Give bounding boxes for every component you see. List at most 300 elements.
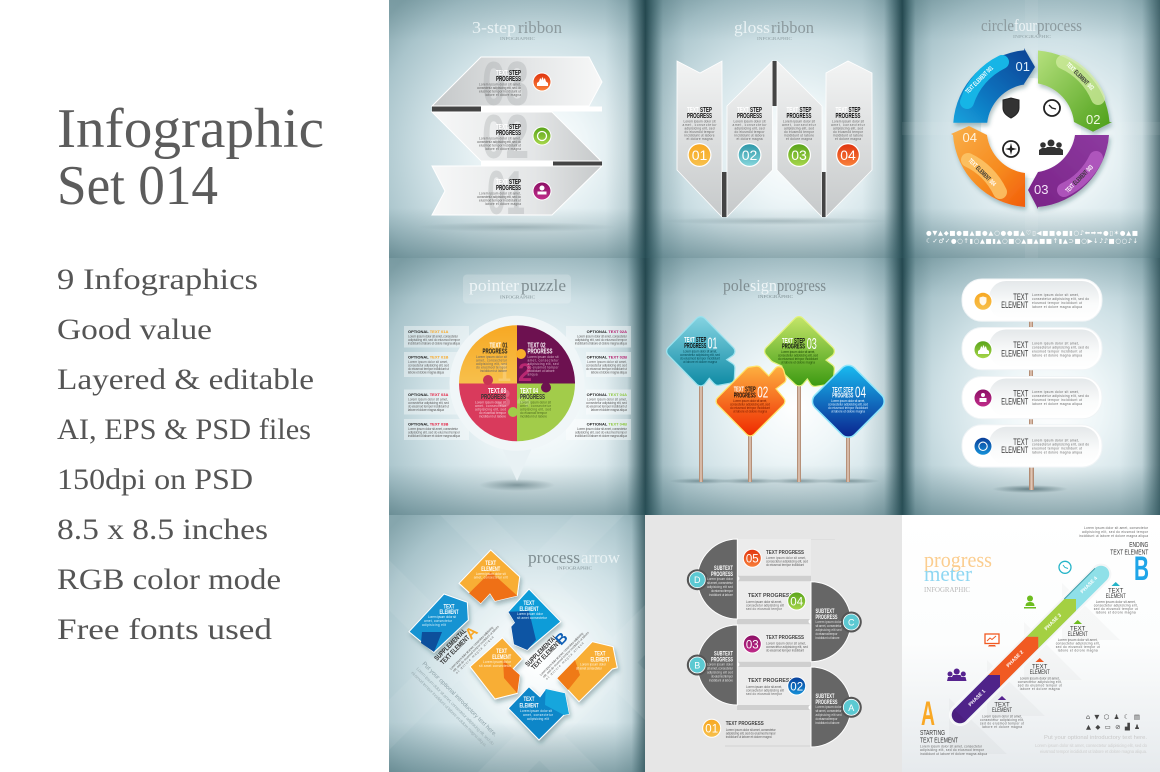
icon: compass bbox=[1003, 141, 1019, 157]
side text boxes right: OPTIONAL TEXT 04A bbox=[587, 392, 627, 397]
ribbon 03: TEXT STEP bbox=[786, 107, 812, 114]
heading bbox=[734, 18, 814, 41]
center disc bbox=[981, 78, 1081, 178]
panel: progress meter bbox=[902, 515, 1160, 772]
ribbon 01: 01 bbox=[692, 147, 707, 163]
half circle D: PROGRESS bbox=[711, 571, 733, 578]
pill 4: Lorem ipsum dolor sit amet, bbox=[1032, 438, 1079, 442]
side text boxes right: OPTIONAL TEXT 02B bbox=[587, 354, 627, 360]
side text boxes right: OPTIONAL TEXT 02A bbox=[587, 329, 627, 334]
half circle C: Lorem ipsum dolor bbox=[816, 620, 842, 624]
quadrant text 03: TEXT 03 bbox=[488, 388, 506, 395]
puzzle circle: 3 bbox=[497, 385, 511, 413]
pole segments bbox=[1029, 321, 1034, 490]
green arrow 02: TEXT ELEMENT 002 bbox=[1065, 61, 1095, 92]
heading: sign bbox=[750, 276, 777, 295]
heading: arrow bbox=[581, 548, 621, 567]
ribbon 03: consectetur adipisicing elit, sed do bbox=[477, 86, 521, 90]
quadrant text 02: Lorem ipsum dolor sit bbox=[528, 355, 559, 359]
half circle C: incididunt ut labore bbox=[816, 636, 840, 640]
step 03: do eiusmod tempor incididunt bbox=[766, 648, 804, 652]
side text boxes right: Lorem ipsum dolor sit amet, consectetur bbox=[577, 427, 628, 431]
callout phase 4: TEXT bbox=[1108, 588, 1124, 594]
ribbon 02: Lorem ipsum dolor sit bbox=[734, 120, 766, 124]
heading: four bbox=[1014, 16, 1037, 35]
side text boxes left: consectetur adipisicing elit, sed bbox=[408, 401, 449, 405]
heading: INFOGRAPHIC bbox=[500, 36, 535, 41]
sign 01: ut labore et dolore magna bbox=[683, 360, 717, 364]
purple arrow 03: TEXT ELEMENT 003 bbox=[1064, 164, 1095, 194]
side text boxes left: Lorem ipsum dolor sit amet, consectetur bbox=[408, 334, 459, 338]
sign 04: Lorem ipsum dolor sit amet, bbox=[831, 399, 865, 403]
pill 2: eiusmod tempor incididunt ut bbox=[1032, 350, 1082, 354]
quadrant text 01: TEXT 01 bbox=[490, 342, 508, 350]
row label 02: TEXT PROGRESS bbox=[748, 678, 793, 684]
ribbon 02: TEXT STEP bbox=[496, 124, 521, 131]
purple arrow 03 bbox=[1028, 135, 1109, 209]
heading bbox=[472, 18, 562, 41]
rows bbox=[725, 539, 835, 747]
sign 01: 01 bbox=[708, 336, 718, 353]
sign 04: PROGRESS bbox=[832, 392, 853, 400]
step 03: consectetur adipisicing elit, sed bbox=[766, 645, 808, 649]
side text boxes right: Lorem ipsum dolor sit amet, bbox=[587, 398, 627, 402]
sign 01 bbox=[672, 322, 730, 380]
sign 04: TEXT STEP bbox=[832, 387, 853, 394]
quadrant text 03 bbox=[475, 388, 507, 418]
callout phase 4: labore et dolore magna bbox=[1096, 610, 1136, 614]
orange right arrow bbox=[557, 642, 617, 702]
callout phase 3: Lorem ipsum dolor sit amet, bbox=[1058, 638, 1098, 642]
quadrant text 04: PROGRESS bbox=[520, 394, 545, 401]
puzzle circle: 2 bbox=[518, 359, 532, 387]
callout phase 3: ELEMENT bbox=[1068, 632, 1088, 638]
sign 02: do eiusmod tempor incididunt bbox=[730, 406, 770, 410]
callout phase 3: sed do eiusmod tempor ut bbox=[1056, 645, 1100, 649]
feature list: Free fonts used bbox=[57, 613, 272, 646]
pill 2: ELEMENT bbox=[1001, 348, 1029, 358]
phase 2 segment: PHASE 2 bbox=[1006, 649, 1025, 669]
orange top arrow: TEXT bbox=[485, 561, 496, 567]
quadrant text 02: aliqua bbox=[528, 372, 538, 376]
pill 4: labore et dolore magna aliqua bbox=[1032, 450, 1082, 454]
half circle D: adipisicing elit sed bbox=[707, 585, 733, 589]
step 05: TEXT PROGRESS bbox=[766, 550, 804, 556]
pill 3: Lorem ipsum dolor sit amet, bbox=[1032, 390, 1079, 394]
pill 1: eiusmod tempor incididunt ut bbox=[1032, 301, 1082, 305]
row label 04: consectetur adipisicing elit bbox=[746, 604, 784, 608]
half circle C: SUBTEXT bbox=[816, 608, 835, 615]
side text boxes left: labore et dolore magna aliqua bbox=[408, 408, 444, 412]
sign 03: consectetur adipisicing elit, sed bbox=[778, 354, 818, 358]
half circle C bbox=[811, 582, 862, 662]
ending text block: adipisicing elit, sed do eiusmod tempor bbox=[1082, 530, 1149, 534]
sign 01: TEXT STEP bbox=[684, 337, 706, 344]
callout phase 2: labore et dolore magna bbox=[1020, 687, 1060, 691]
starting text block: Lorem ipsum dolor sit amet, consectetur bbox=[920, 744, 983, 748]
heading bbox=[924, 547, 992, 594]
step 05: consectetur adipisicing elit, sed bbox=[766, 560, 808, 564]
ending text block: incididunt ut labore et dolore magna aliqua bbox=[1079, 534, 1148, 538]
ribbon 04: amet, consectetur bbox=[831, 123, 866, 127]
phase 1 segment: PHASE 1 bbox=[968, 688, 987, 708]
ending text block: B bbox=[1134, 550, 1149, 588]
pill 1: ELEMENT bbox=[1001, 300, 1029, 310]
ribbon 01: incididunt ut labore bbox=[684, 134, 715, 138]
pill 4: consectetur adipisicing elit, sed do bbox=[1032, 442, 1089, 446]
ribbon 01: PROGRESS bbox=[687, 113, 712, 120]
ribbon 03: TEXT STEP bbox=[496, 70, 521, 77]
intro copy bbox=[1035, 735, 1148, 754]
row label 02: 02 bbox=[790, 681, 803, 693]
callout phase 1: consectetur adipisicing elit, bbox=[980, 718, 1024, 722]
heading: INFOGRAPHIC bbox=[757, 36, 792, 41]
feature list bbox=[57, 263, 314, 646]
half circle A: Lorem ipsum dolor bbox=[816, 705, 842, 709]
quadrant text 01: amet, consectetur bbox=[476, 358, 508, 362]
quadrant text 02: amet, consectetur bbox=[528, 358, 559, 362]
orange middle arrow: Lorem ipsum dolor bbox=[483, 660, 512, 664]
sign 01: Lorem ipsum dolor sit amet, bbox=[683, 350, 717, 354]
callout phase 3: TEXT bbox=[1070, 626, 1086, 632]
row label 04 bbox=[746, 592, 806, 611]
quadrant text 02: PROGRESS bbox=[528, 348, 553, 356]
ribbon 01: TEXT STEP bbox=[496, 179, 521, 186]
callout phase 1 bbox=[980, 696, 1024, 729]
ribbon 03: eiusmod tempor incididunt ut bbox=[479, 90, 521, 94]
sign 04: do eiusmod tempor incididunt bbox=[828, 406, 868, 410]
heading: process bbox=[528, 548, 580, 567]
intro text: eiusmod tempor incididunt ut labore et dolore magna aliqua. bbox=[410, 670, 488, 748]
ribbon 03: Lorem ipsum dolor sit bbox=[783, 120, 815, 124]
icon: clock bbox=[1044, 100, 1060, 116]
ribbon 02: 02 bbox=[742, 147, 757, 163]
intro copy: Lorem ipsum dolor sit amet, consectetur adipisicing elit, sed do bbox=[1035, 743, 1148, 748]
pill 2: labore et dolore magna aliqua bbox=[1032, 354, 1082, 358]
starting text block: incididunt ut labore et dolore magna aliqua bbox=[920, 752, 987, 756]
callout phase 1: Lorem ipsum dolor sit amet, bbox=[982, 714, 1022, 718]
step 03: TEXT PROGRESS bbox=[766, 635, 804, 641]
row label 04: TEXT PROGRESS bbox=[748, 593, 793, 599]
half circle A: SUBTEXT bbox=[816, 693, 835, 700]
quadrant text 01: adipisicing elit, sed bbox=[476, 362, 507, 366]
half circle D: D bbox=[694, 575, 701, 585]
step 01: TEXT PROGRESS bbox=[726, 721, 764, 727]
heading: 3-step bbox=[472, 18, 516, 37]
half circle C: do eiusmod tempor bbox=[816, 632, 838, 636]
heading: progress bbox=[924, 547, 992, 572]
heading: ribbon bbox=[518, 18, 562, 37]
ribbon 02: incididunt ut labore bbox=[734, 134, 765, 138]
quadrant text 01 bbox=[476, 342, 508, 373]
feature list: 9 Infographics bbox=[57, 263, 258, 296]
ribbon 02: et dolore magna bbox=[736, 137, 763, 141]
sign 04: consectetur adipisicing elit, sed bbox=[828, 402, 868, 406]
ribbon 04: TEXT STEP bbox=[836, 107, 861, 114]
quadrant text 04: do eiusmod tempor bbox=[520, 411, 548, 415]
ribbon 01: PROGRESS bbox=[496, 185, 521, 192]
half circle C: adipisicing elit sed bbox=[816, 628, 842, 632]
blue bottom arrow bbox=[508, 687, 569, 740]
blue bottom arrow: TEXT bbox=[524, 697, 535, 703]
blue right arrow: Lorem ipsum dolor bbox=[517, 612, 544, 616]
orange arrow 04: 04 bbox=[962, 130, 977, 145]
supplemental text A: elit, sed do eiusmod tempor incididunt ut labore bbox=[452, 624, 500, 673]
ribbon 02: PROGRESS bbox=[737, 113, 762, 120]
half circle D: incididunt ut labore bbox=[709, 593, 733, 597]
half circle C: C bbox=[848, 618, 855, 628]
step 03 bbox=[743, 635, 808, 653]
sign 01: do eiusmod tempor incididunt bbox=[680, 356, 720, 360]
callout phase 4: ELEMENT bbox=[1106, 594, 1126, 600]
callout phase 2: ELEMENT bbox=[1030, 670, 1050, 676]
supplemental text B: TEXT ELEMENT bbox=[530, 639, 563, 671]
pill 3: TEXT bbox=[1013, 388, 1029, 398]
heading: progress bbox=[777, 276, 826, 295]
green arrow 02 bbox=[1038, 50, 1112, 132]
ribbon 01 bbox=[677, 61, 726, 217]
panel: vertical pill list bbox=[902, 258, 1160, 515]
blue left arrow: TEXT bbox=[444, 604, 455, 610]
icon: person bbox=[1024, 596, 1036, 608]
ribbon 03: amet, consectetur bbox=[782, 123, 817, 127]
sign 04 bbox=[809, 362, 888, 441]
row label 02: sed do eiusmod tempor bbox=[746, 692, 783, 696]
small icons grid bbox=[1086, 713, 1140, 731]
ribbon 03 bbox=[432, 50, 602, 119]
supplemental text B: Lorem ipsum dolor sit amet, consectetur adipisicing bbox=[539, 631, 584, 677]
pointer pin bbox=[450, 316, 584, 481]
icon: clock bbox=[1059, 561, 1071, 573]
supplemental text A: et dolore magna aliqua bbox=[455, 635, 495, 675]
half circle D: sit amet, consectetur bbox=[707, 581, 734, 585]
quadrant text 03: PROGRESS bbox=[481, 394, 506, 401]
sign 03: do eiusmod tempor incididunt bbox=[778, 357, 818, 361]
quadrant text 04: adipisicing elit, sed bbox=[520, 408, 551, 412]
ribbon 01: Lorem ipsum dolor sit amet, bbox=[479, 192, 521, 196]
row label 04: 04 bbox=[790, 596, 804, 608]
quadrant text 03: adipisicing elit, sed bbox=[475, 408, 506, 412]
feature list: AI, EPS & PSD files bbox=[57, 413, 311, 446]
icon: shield bbox=[1003, 98, 1019, 118]
ribbon 03: Lorem ipsum dolor sit amet, bbox=[479, 82, 521, 86]
sign 03 bbox=[770, 322, 829, 381]
ribbon 04: Lorem ipsum dolor sit bbox=[832, 120, 864, 124]
orange middle arrow: sit amet consectetur bbox=[479, 664, 512, 668]
ribbon 01: TEXT STEP bbox=[687, 107, 712, 114]
heading: INFOGRAPHIC bbox=[758, 294, 793, 299]
phase 3 segment: PHASE 3 bbox=[1044, 612, 1063, 632]
poles bbox=[699, 385, 850, 482]
blue right arrow: ELEMENT bbox=[520, 607, 539, 613]
ribbon 03: 03 bbox=[482, 50, 529, 119]
pill 1: TEXT bbox=[1013, 292, 1029, 302]
side text boxes right: do eiusmod tempor incididunt ut bbox=[586, 367, 627, 371]
side text boxes right: incididunt ut labore et dolore magna aliqua bbox=[575, 342, 627, 346]
callout phase 3: labore et dolore magna bbox=[1058, 648, 1098, 652]
supplemental text A bbox=[433, 623, 500, 675]
blue bottom arrow: adipisicing elit bbox=[527, 717, 549, 721]
starting text block: TEXT ELEMENT bbox=[920, 736, 958, 744]
blue bottom arrow: ELEMENT bbox=[520, 704, 539, 710]
ending text block bbox=[1079, 526, 1149, 588]
callout phase 4: sed do eiusmod tempor ut bbox=[1094, 607, 1138, 611]
side text boxes left: Lorem ipsum dolor sit amet, bbox=[408, 398, 448, 402]
side text boxes right: labore et dolore magna aliqua bbox=[591, 408, 627, 412]
half circle B: incididunt ut labore bbox=[709, 678, 733, 682]
ribbon 02 bbox=[727, 61, 777, 217]
ribbon 01: eiusmod tempor incididunt ut bbox=[479, 198, 521, 202]
panel: pole sign progress bbox=[645, 258, 902, 515]
quadrant text 01: PROGRESS bbox=[482, 348, 508, 356]
ribbon 03: 03 bbox=[791, 147, 807, 163]
side text boxes left: OPTIONAL TEXT 03B bbox=[408, 422, 449, 426]
feature list: Good value bbox=[57, 313, 212, 346]
circular arrows bbox=[951, 48, 1112, 209]
heading: INFOGRAPHIC bbox=[1013, 34, 1051, 39]
panel: circle four process bbox=[902, 0, 1160, 258]
side text boxes left: OPTIONAL TEXT 01B bbox=[408, 354, 449, 360]
heading bbox=[463, 274, 571, 304]
ribbon 04: et dolore magna bbox=[835, 137, 861, 141]
pill 3: eiusmod tempor incididunt ut bbox=[1032, 398, 1082, 402]
pill 4: TEXT bbox=[1013, 437, 1029, 447]
orange right arrow: ELEMENT bbox=[590, 658, 610, 664]
blue right arrow: sit amet consectetur bbox=[517, 616, 548, 620]
blue left arrow: amet, consectetur bbox=[424, 619, 453, 623]
pill 1 bbox=[962, 279, 1102, 321]
side text boxes left: OPTIONAL TEXT 01A bbox=[408, 329, 449, 334]
half circle A: sit amet, consectetur bbox=[816, 709, 842, 713]
phase 1 segment bbox=[952, 675, 1000, 723]
step 01: adipisicing elit, sed do eiusmod tempor bbox=[726, 732, 777, 736]
sign 04: ut labore et dolore magna bbox=[831, 410, 865, 414]
quadrant text 01: do eiusmod tempor bbox=[476, 366, 508, 370]
icon strip: ●▼▲◆■●■▲■●▲○●●■▲♡▯◀■■●■▮○♪⬅➡➡●▯✶●▲■ bbox=[926, 229, 1138, 237]
orange top arrow bbox=[459, 550, 520, 603]
half circle A: PROGRESS bbox=[816, 699, 838, 706]
orange top arrow: ELEMENT bbox=[481, 567, 500, 573]
icon strip bbox=[926, 229, 1138, 245]
side text boxes left: Lorem ipsum dolor sit amet, consectetur bbox=[408, 427, 459, 431]
ribbon 04: 04 bbox=[840, 147, 856, 163]
blue arrow 01: TEXT ELEMENT 001 bbox=[964, 65, 995, 95]
feature list: RGB color mode bbox=[57, 563, 281, 596]
callout phase 4 bbox=[1094, 582, 1138, 614]
ribbon 01: amet, consectetur bbox=[682, 123, 717, 127]
blue arrow 01 bbox=[953, 48, 1035, 123]
quadrant text 04 bbox=[520, 388, 552, 418]
ending text block: Lorem ipsum dolor sit amet, consectetur bbox=[1084, 526, 1149, 530]
callout phase 3 bbox=[1056, 620, 1100, 652]
blue bottom arrow: amet, consectetur bbox=[523, 713, 554, 717]
ribbon 02: eiusmod tempor incididunt ut bbox=[479, 144, 521, 148]
side text boxes right: do eiusmod tempor incididunt ut bbox=[586, 404, 627, 408]
ribbon 02: do eiusmod tempor bbox=[734, 130, 765, 134]
blue left arrow: adipisicing elit bbox=[422, 623, 446, 627]
row label 02: consectetur adipisicing elit bbox=[746, 688, 784, 692]
side text boxes left: do eiusmod tempor incididunt ut bbox=[408, 367, 449, 371]
blue left arrow: ELEMENT bbox=[440, 610, 459, 616]
orange right arrow: TEXT bbox=[594, 652, 606, 658]
pill 3: labore et dolore magna aliqua bbox=[1032, 402, 1082, 406]
panel: grey subtext progress bbox=[645, 515, 902, 772]
quadrant text 03: incididunt ut labore bbox=[479, 414, 506, 418]
half circle B: SUBTEXT bbox=[714, 650, 733, 658]
ribbon 02: TEXT STEP bbox=[737, 107, 762, 114]
pole shadows bbox=[669, 478, 880, 484]
callout phase 3: consectetur adipisicing elit, bbox=[1056, 642, 1100, 646]
pill 2: Lorem ipsum dolor sit amet, bbox=[1032, 342, 1079, 346]
half circle D: SUBTEXT bbox=[714, 565, 733, 572]
quadrant text 01: Lorem ipsum dolor sit bbox=[476, 355, 507, 359]
step 01: incididunt ut labore et dolore magna bbox=[726, 735, 772, 739]
orange middle arrow: ELEMENT bbox=[492, 655, 511, 661]
half circle B bbox=[687, 625, 737, 705]
feature list: 8.5 x 8.5 inches bbox=[57, 513, 268, 546]
ribbon 01: 01 bbox=[487, 159, 525, 228]
sign 01: PROGRESS bbox=[684, 343, 706, 350]
row label 02 bbox=[746, 677, 806, 696]
green arrow 02: 02 bbox=[1086, 112, 1100, 127]
small icons grid: ▲ ◆ ▭ ⊘ ▟ ♟ bbox=[1086, 723, 1140, 731]
phase 4 segment: PHASE 4 bbox=[1080, 575, 1099, 595]
ribbon 02: labore et dolore magna bbox=[485, 147, 521, 151]
heading: gloss bbox=[734, 18, 770, 37]
callout phase 2 bbox=[1018, 658, 1062, 691]
heading: meter bbox=[924, 561, 973, 586]
ending text block: ENDING bbox=[1129, 540, 1148, 549]
supplemental text A: Lorem ipsum dolor sit amet, consectetur adipisicing bbox=[449, 625, 494, 671]
ribbon 04: PROGRESS bbox=[836, 113, 861, 120]
panel: 3-step ribbon bbox=[389, 0, 645, 258]
ribbon 01: Lorem ipsum dolor sit bbox=[684, 120, 716, 124]
ribbon 03: PROGRESS bbox=[786, 113, 812, 120]
ribbon 01: labore et dolore magna bbox=[485, 202, 521, 206]
puzzle circle bbox=[459, 325, 575, 442]
side text boxes left: consectetur adipisicing elit, sed bbox=[408, 364, 449, 368]
quadrant text 03: amet, consectetur bbox=[475, 404, 507, 408]
heading bbox=[981, 16, 1082, 39]
orange arrow 04: TEXT ELEMENT 004 bbox=[967, 157, 997, 188]
ribbon 02: amet, consectetur bbox=[732, 123, 767, 127]
pill 3: consectetur adipisicing elit, sed do bbox=[1032, 394, 1089, 398]
heading: pointer bbox=[469, 276, 519, 295]
orange middle arrow: TEXT bbox=[496, 649, 507, 655]
sign 03: Lorem ipsum dolor sit amet, bbox=[781, 350, 815, 354]
callout phase 1: ELEMENT bbox=[992, 708, 1012, 714]
ribbon 03 bbox=[777, 61, 826, 217]
phase 2 segment bbox=[988, 637, 1038, 687]
quadrant text 04: amet, consectetur bbox=[520, 404, 552, 408]
ribbon 02: 02 bbox=[482, 103, 529, 172]
side text boxes right: adipisicing elit, sed do eiusmod tempor bbox=[575, 430, 628, 434]
step 05: do eiusmod tempor incididunt bbox=[766, 563, 804, 567]
sign 02: ut labore et dolore magna bbox=[733, 410, 767, 414]
panel: gloss ribbon bbox=[645, 0, 902, 258]
quadrant text 02 bbox=[528, 342, 559, 376]
feature list: 150dpi on PSD bbox=[57, 463, 253, 496]
orange arrow 04 bbox=[951, 126, 1025, 207]
callout phase 2: Lorem ipsum dolor sit amet, bbox=[1020, 676, 1060, 680]
supplemental text B: et dolore magna aliqua bbox=[545, 641, 585, 681]
ribbon 04: adipisicing elit, sed bbox=[833, 126, 863, 130]
half circle D bbox=[687, 539, 737, 619]
side text boxes right: incididunt ut labore et dolore magna aliqua bbox=[575, 434, 627, 438]
callout phase 2: consectetur adipisicing elit, bbox=[1018, 680, 1062, 684]
callout phase 1: labore et dolore magna bbox=[982, 725, 1022, 729]
ribbon 03: labore et dolore magna bbox=[485, 93, 521, 97]
